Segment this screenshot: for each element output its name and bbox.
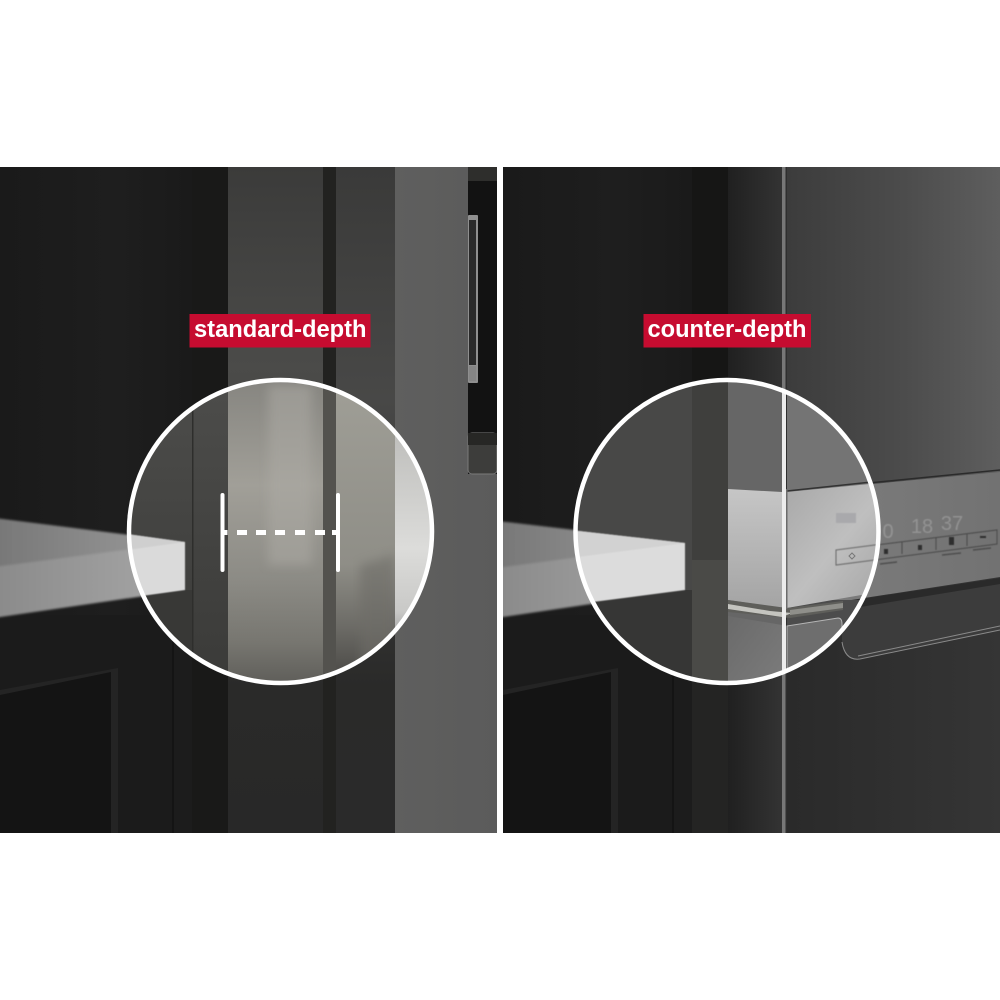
lens column highlight — [268, 385, 312, 565]
lens contents — [120, 375, 435, 690]
left bracket line — [220, 493, 224, 572]
countertop — [0, 517, 142, 618]
lens side strip — [692, 375, 728, 690]
depth measure: bracket with dashed line — [220, 493, 340, 572]
magnifier lens: standard-depth — [120, 375, 435, 690]
cabinet side strip — [192, 167, 228, 833]
panel: counter-depth scene — [497, 167, 1000, 833]
lens silver corner side — [728, 489, 782, 608]
lens control strip — [836, 543, 890, 565]
lens countertop — [570, 530, 685, 605]
panel: standard-depth scene — [0, 167, 497, 833]
temperature readouts: 18 — [911, 516, 933, 538]
panel divider — [497, 167, 503, 833]
base cabinet door — [0, 672, 111, 833]
lens door gap shadow — [787, 480, 890, 491]
second column — [336, 167, 395, 833]
base cabinet door — [503, 672, 611, 833]
wall oven niche — [468, 167, 497, 474]
lens ring — [129, 380, 432, 683]
lens fridge side — [728, 375, 782, 690]
cabinet wall — [0, 167, 192, 615]
lens door edge trim — [782, 375, 786, 690]
lens lower corner front — [787, 618, 842, 685]
lens cabinet wall — [131, 412, 192, 590]
temperature readouts — [883, 516, 962, 538]
lens contents — [570, 375, 890, 690]
temperature readouts: 0 — [882, 521, 894, 543]
handle recess — [842, 588, 980, 658]
cabinet side strip — [692, 167, 728, 382]
lens control icon — [849, 553, 855, 559]
upper door — [787, 167, 1000, 497]
lens silver door panel — [787, 482, 890, 608]
lens trim shadow — [786, 489, 788, 609]
label: counter-depth: counter-depth — [648, 316, 806, 343]
countertop — [503, 520, 592, 618]
door top edge — [872, 469, 1000, 484]
lens column — [228, 375, 323, 690]
lens display block — [836, 513, 856, 523]
infographic: depth comparison — [0, 167, 1000, 833]
lens lower corner — [728, 616, 782, 690]
lens countertop — [120, 533, 185, 599]
magnifier lens: counter-depth — [570, 375, 890, 690]
lens under-counter cabinet — [570, 590, 692, 690]
lens cabinet edge — [192, 410, 194, 652]
column shadow gap — [323, 167, 336, 833]
lower door — [787, 570, 1000, 833]
lens fridge front — [395, 375, 435, 690]
fridge side column — [228, 167, 323, 833]
lens side strip — [194, 392, 228, 671]
lens cabinet wall — [570, 375, 692, 690]
cabinet wall — [503, 167, 692, 615]
lens second column — [336, 393, 395, 670]
trim shadow — [786, 167, 787, 833]
lens door — [787, 375, 887, 500]
display panel — [833, 472, 1000, 600]
door edge trim — [782, 167, 786, 833]
fridge side — [728, 167, 782, 833]
lens hinge — [728, 600, 843, 618]
fridge front — [395, 167, 497, 833]
handle recess outline — [842, 626, 1000, 659]
lens ring — [576, 380, 878, 683]
control captions — [880, 547, 992, 565]
lens recess — [787, 600, 887, 690]
lower column shading — [692, 682, 728, 833]
lens shadow gap — [323, 375, 336, 690]
control strip — [878, 529, 998, 560]
lens reflection — [360, 555, 395, 690]
temperature readouts: 37 — [941, 513, 963, 535]
right bracket line — [336, 493, 340, 572]
label: standard-depth: standard-depth — [194, 316, 366, 343]
control icons — [884, 536, 986, 554]
lens lower strip — [692, 560, 728, 690]
dashed span — [224, 530, 336, 535]
display shadow — [858, 578, 1000, 607]
lens base cabinet — [120, 590, 192, 690]
